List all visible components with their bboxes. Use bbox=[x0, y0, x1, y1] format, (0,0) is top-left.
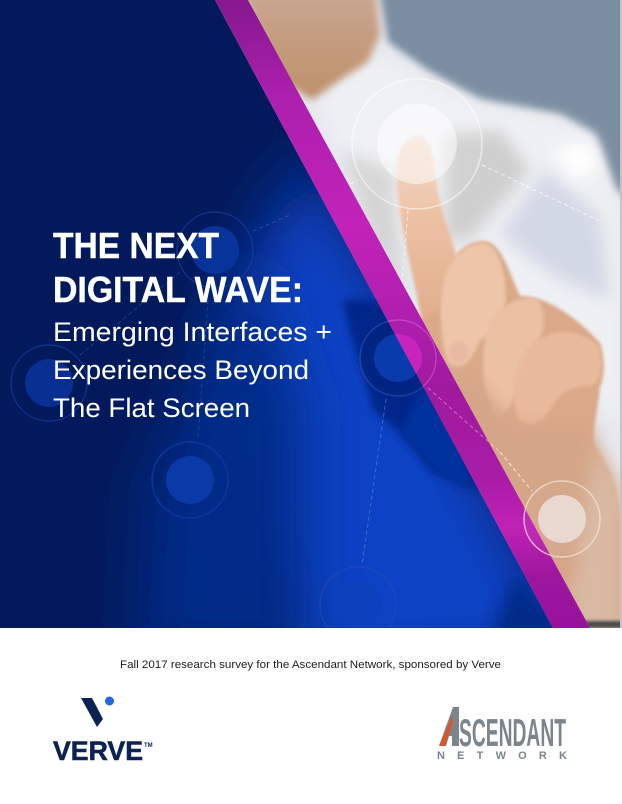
purple diagonal band bbox=[215, 0, 590, 628]
right page edge bbox=[620, 0, 622, 628]
hand: thumbnail bbox=[451, 342, 467, 362]
sleeve shadow bbox=[343, 300, 490, 495]
hand: wrist tone bbox=[453, 376, 618, 591]
torso glow bbox=[230, 160, 580, 680]
torso left fade bbox=[140, 260, 300, 660]
title bbox=[53, 225, 332, 423]
logo: Ascendant Network bbox=[437, 707, 567, 762]
hand: fist and wrist bbox=[420, 241, 622, 640]
logo: Ascendant Network: NETWORK bbox=[437, 750, 567, 762]
lower right shadow bbox=[487, 578, 553, 628]
network node: upper left bbox=[177, 212, 253, 288]
face: blurred chin and neck bbox=[240, 0, 380, 100]
title: THE NEXT bbox=[53, 225, 219, 266]
title: Experiences Beyond bbox=[53, 355, 309, 385]
network node: wrist bbox=[524, 481, 600, 557]
logo: Verve bbox=[53, 696, 153, 766]
network graphic: connecting dashed lines bbox=[80, 165, 602, 565]
network node: bottom bbox=[320, 567, 396, 643]
hand: curled fingers bbox=[514, 332, 602, 424]
hand: pointing finger bbox=[397, 135, 456, 330]
hand: index knuckle bbox=[483, 298, 544, 418]
title: Emerging Interfaces + bbox=[53, 317, 332, 347]
survey note: Fall 2017 research survey for the Ascendant Network, sponsored by Verve bbox=[120, 659, 501, 671]
network node: centre bbox=[360, 320, 436, 396]
logo: Verve: VERVE bbox=[53, 736, 143, 766]
panel: cover photo of pointing hand bbox=[240, 0, 622, 640]
dark shadow at photo base bbox=[575, 621, 622, 628]
network node: middle bbox=[152, 442, 228, 518]
network node: fingertip bbox=[352, 79, 482, 209]
hand: thumb bbox=[441, 243, 506, 367]
logo: Verve: TM bbox=[144, 743, 153, 749]
background: grey wall bbox=[376, 0, 622, 210]
network node: left bbox=[11, 345, 87, 421]
sleeve highlight bbox=[403, 389, 469, 482]
title: The Flat Screen bbox=[53, 393, 250, 423]
panel: blue overlay with torso silhouette bbox=[0, 0, 553, 628]
title: DIGITAL WAVE: bbox=[53, 269, 303, 310]
white footer panel bbox=[0, 628, 622, 804]
shirt: white collar and shoulder shading bbox=[334, 66, 620, 393]
